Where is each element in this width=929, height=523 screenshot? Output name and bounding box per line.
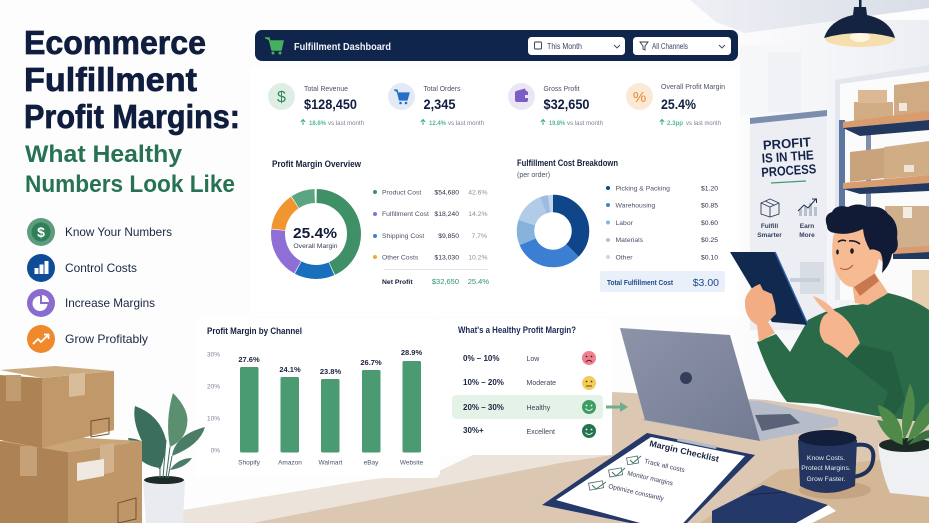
checklist item: optimize constantly: Optimize constantly <box>608 483 665 503</box>
kpi: overall profit margin: vs last month <box>686 120 721 127</box>
item: grow profitably <box>27 325 148 353</box>
clipboard: margin checklist <box>542 433 755 523</box>
title <box>24 24 240 135</box>
y axis labels: 0% <box>211 448 220 454</box>
laptop lid <box>620 328 760 441</box>
banner: profit is in the process: PROCESS <box>761 161 817 180</box>
icon: happy face <box>582 400 596 414</box>
person with tablet <box>730 204 929 423</box>
banner captions: Fulfill <box>761 223 778 230</box>
y axis labels: 10% <box>207 416 220 422</box>
kpi: overall profit margin: Overall Profit Margin <box>661 82 725 91</box>
legend: cost table: Net Profit <box>382 279 413 286</box>
kpi: gross profit: $32,650 <box>544 97 590 112</box>
legend: cost table: Fulfillment Cost <box>382 211 429 218</box>
mug <box>798 430 873 499</box>
legend: cost per order: Materials <box>616 237 644 244</box>
legend: cost table: $18,240 <box>434 211 459 218</box>
checklist item: optimize constantly <box>589 481 665 503</box>
bar values: 27.6% <box>238 355 260 364</box>
subtitle <box>25 141 235 198</box>
legend: cost table: $32,650 <box>432 277 459 286</box>
title: Ecommerce <box>24 24 206 61</box>
icon: neutral face <box>582 376 596 390</box>
pendant lamp <box>824 0 895 47</box>
kpi cards <box>268 82 725 127</box>
channel labels: Walmart <box>319 460 343 466</box>
hand holding tablet <box>745 284 776 342</box>
kpi: total revenue: vs last month <box>328 120 364 127</box>
panel: profit margin by channel <box>195 318 440 478</box>
dashboard header bar <box>255 30 738 61</box>
y axis labels <box>207 352 220 454</box>
kpi: gross profit: 19.8% <box>549 120 565 127</box>
icon: sad face <box>582 351 596 365</box>
plant: left pot <box>128 393 205 523</box>
lower box <box>0 437 142 523</box>
checklist item: monitor margins <box>609 468 674 488</box>
kpi: total orders: Total Orders <box>424 84 461 93</box>
kpi: gross profit <box>508 83 603 127</box>
face details <box>836 240 860 269</box>
arrow: healthy to laptop <box>606 402 628 412</box>
upper box <box>0 366 114 448</box>
legend: cost per order: $0.25 <box>701 237 718 244</box>
donut chart: overall margin <box>278 196 354 272</box>
channel labels: eBay <box>364 460 379 466</box>
ear <box>878 248 892 262</box>
kpi: total orders: 12.4% <box>429 120 446 127</box>
title: Fulfillment <box>24 61 197 98</box>
panel: healthy profit margin scale: Healthy <box>526 405 551 412</box>
legend: cost table: 14.2% <box>468 211 488 218</box>
banner: profit is in the process: PROFIT <box>762 134 811 153</box>
icon: excellent face <box>582 424 596 438</box>
panel: healthy profit margin scale: Low <box>526 356 540 363</box>
sweater shading <box>845 345 905 414</box>
kpi: overall profit margin <box>626 82 725 127</box>
legend: cost per order: Other <box>616 254 633 262</box>
bar values: 26.7% <box>360 358 382 367</box>
legend: cost per order: Warehousing <box>616 202 656 210</box>
face <box>832 225 880 287</box>
legend: cost per order: $0.60 <box>701 220 718 227</box>
donut chart: overall margin: 25.4% <box>293 225 337 242</box>
legend: cost per order: $0.85 <box>701 202 718 210</box>
icon: growth chart <box>798 199 817 216</box>
kpi: total revenue: $128,450 <box>304 97 357 112</box>
legend: cost table: $13,030 <box>434 254 459 262</box>
dashboard background panel <box>250 66 740 316</box>
plant: right pot <box>877 383 929 497</box>
banner captions <box>757 223 815 239</box>
legend: cost table: 25.4% <box>468 277 489 286</box>
legend: cost table: Other Costs <box>382 254 419 262</box>
laptop base <box>640 400 838 441</box>
kpi: total revenue <box>268 83 364 127</box>
channel labels: Website <box>400 460 424 466</box>
dropdown: all channels <box>633 37 731 55</box>
banner captions: More <box>799 232 815 239</box>
dropdown: this month: This Month <box>547 42 582 51</box>
legend: cost table: 7.7% <box>472 233 487 240</box>
kpi: overall profit margin: 2.3pp <box>667 120 683 127</box>
dropdown: this month <box>528 37 625 55</box>
panel: healthy profit margin scale <box>440 318 612 455</box>
item: know your numbers: $ <box>37 224 45 240</box>
laptop keyboard <box>755 414 800 431</box>
kpi: total revenue: $ <box>277 89 286 106</box>
clipboard: margin checklist: Margin Checklist <box>649 438 720 464</box>
mug: Protect Margins. <box>801 465 851 472</box>
item: increase margins: Increase Margins <box>65 296 155 310</box>
cardboard boxes <box>0 366 142 523</box>
mug: Grow Faster. <box>807 476 846 483</box>
title: Profit Margins: <box>24 98 240 135</box>
channel labels: Amazon <box>278 460 302 466</box>
channel labels <box>238 460 424 466</box>
checklist item: track all costs <box>627 456 686 474</box>
donut chart: cost breakdown <box>526 204 580 258</box>
total fulfillment cost: $3.00 <box>693 277 719 289</box>
legend: cost table: Shipping Cost <box>382 233 424 240</box>
tablet <box>730 252 808 325</box>
legend: cost table: 42.6% <box>468 190 488 196</box>
item: control costs <box>27 254 137 282</box>
lower shelf boxes <box>885 206 929 248</box>
icon: box <box>761 199 779 217</box>
kpi: total orders <box>388 83 484 127</box>
dropdown: all channels: All Channels <box>652 42 688 51</box>
warehouse shelves with boxes <box>839 81 929 310</box>
banner: profit is in the process <box>750 110 827 330</box>
y axis labels: 30% <box>207 352 220 358</box>
kpi: overall profit margin: % <box>633 89 646 106</box>
item: know your numbers <box>27 218 172 246</box>
legend: cost per order: $1.20 <box>701 186 718 192</box>
panel: profit margin by channel: Profit Margin by Channel <box>207 326 302 336</box>
item: know your numbers: Know Your Numbers <box>65 225 172 239</box>
kpi: gross profit: Gross Profit <box>544 84 580 93</box>
banner: profit is in the process: IS IN THE <box>761 147 814 166</box>
legend: cost table: $9,850 <box>438 233 459 240</box>
item: grow profitably: Grow Profitably <box>65 332 148 346</box>
bar values <box>238 348 422 376</box>
tablet edge <box>775 252 808 325</box>
list: key actions <box>27 218 172 353</box>
panel: healthy profit margin scale: 0% – 10% <box>463 354 499 363</box>
sweater <box>757 293 929 423</box>
panel: fulfillment cost breakdown: (per order) <box>517 172 550 179</box>
item: control costs: Control Costs <box>65 261 137 275</box>
legend: cost table: Product Cost <box>382 190 421 196</box>
item: increase margins <box>27 289 155 317</box>
panel: healthy profit margin scale: What's a Healthy Profit Margin? <box>458 325 576 335</box>
icon: cart <box>265 38 283 54</box>
kpi: total revenue: Total Revenue <box>304 84 348 93</box>
panel: healthy profit margin scale: 20% – 30% <box>463 403 504 412</box>
total fulfillment cost <box>600 271 725 292</box>
donut chart: overall margin: Overall Margin <box>293 243 338 250</box>
mug: Know Costs. <box>807 455 845 462</box>
laptop <box>620 328 838 441</box>
panel: healthy profit margin scale: 10% – 20% <box>463 378 504 387</box>
panel: profit margin overview: Profit Margin Overview <box>272 159 362 169</box>
panel: fulfillment cost breakdown <box>517 158 725 292</box>
notebook <box>712 485 836 523</box>
panel: profit margin overview <box>272 159 489 286</box>
channel labels: Shopify <box>238 460 261 466</box>
y axis labels: 20% <box>207 384 220 390</box>
bar values: 23.8% <box>320 367 341 376</box>
top shelf boxes <box>854 81 929 121</box>
laptop logo <box>680 372 692 384</box>
kpi: overall profit margin: 25.4% <box>661 97 696 112</box>
hair <box>826 204 898 273</box>
bar values: 24.1% <box>279 365 301 374</box>
legend: cost table <box>373 190 489 286</box>
neck <box>852 272 888 305</box>
pointing hand <box>813 296 860 358</box>
bar values: 28.9% <box>401 348 422 357</box>
middle shelf boxes <box>850 141 929 182</box>
legend: cost table: 10.2% <box>468 254 488 262</box>
kpi: total orders: vs last month <box>448 120 484 127</box>
kpi: total orders: 2,345 <box>424 97 456 112</box>
legend: cost per order: Picking & Packing <box>616 186 670 192</box>
panel: healthy profit margin scale: 30%+ <box>463 426 484 435</box>
legend: cost table: $54,680 <box>434 190 459 196</box>
panel: healthy profit margin scale: Excellent <box>526 429 555 436</box>
kpi: total revenue: 18.6% <box>309 120 326 127</box>
dashboard header bar: Fulfillment Dashboard <box>294 41 391 53</box>
kpi: gross profit: vs last month <box>567 120 603 127</box>
neck shadow <box>854 273 879 296</box>
panel: fulfillment cost breakdown: Fulfillment Cost Breakdown <box>517 158 618 168</box>
legend: cost per order <box>606 186 718 262</box>
panel: healthy profit margin scale: Moderate <box>526 380 556 387</box>
total fulfillment cost: Total Fulfillment Cost <box>607 280 674 287</box>
banner captions: Smarter <box>757 232 782 239</box>
checklist item: monitor margins: Monitor margins <box>627 470 674 488</box>
bar chart <box>240 361 421 452</box>
banner captions: Earn <box>800 223 814 230</box>
subtitle: Numbers Look Like <box>25 171 235 198</box>
subtitle: What Healthy <box>25 141 183 168</box>
legend: cost per order: $0.10 <box>701 254 718 262</box>
checklist item: track all costs: Track all costs <box>644 458 686 474</box>
legend: cost per order: Labor <box>616 220 634 227</box>
